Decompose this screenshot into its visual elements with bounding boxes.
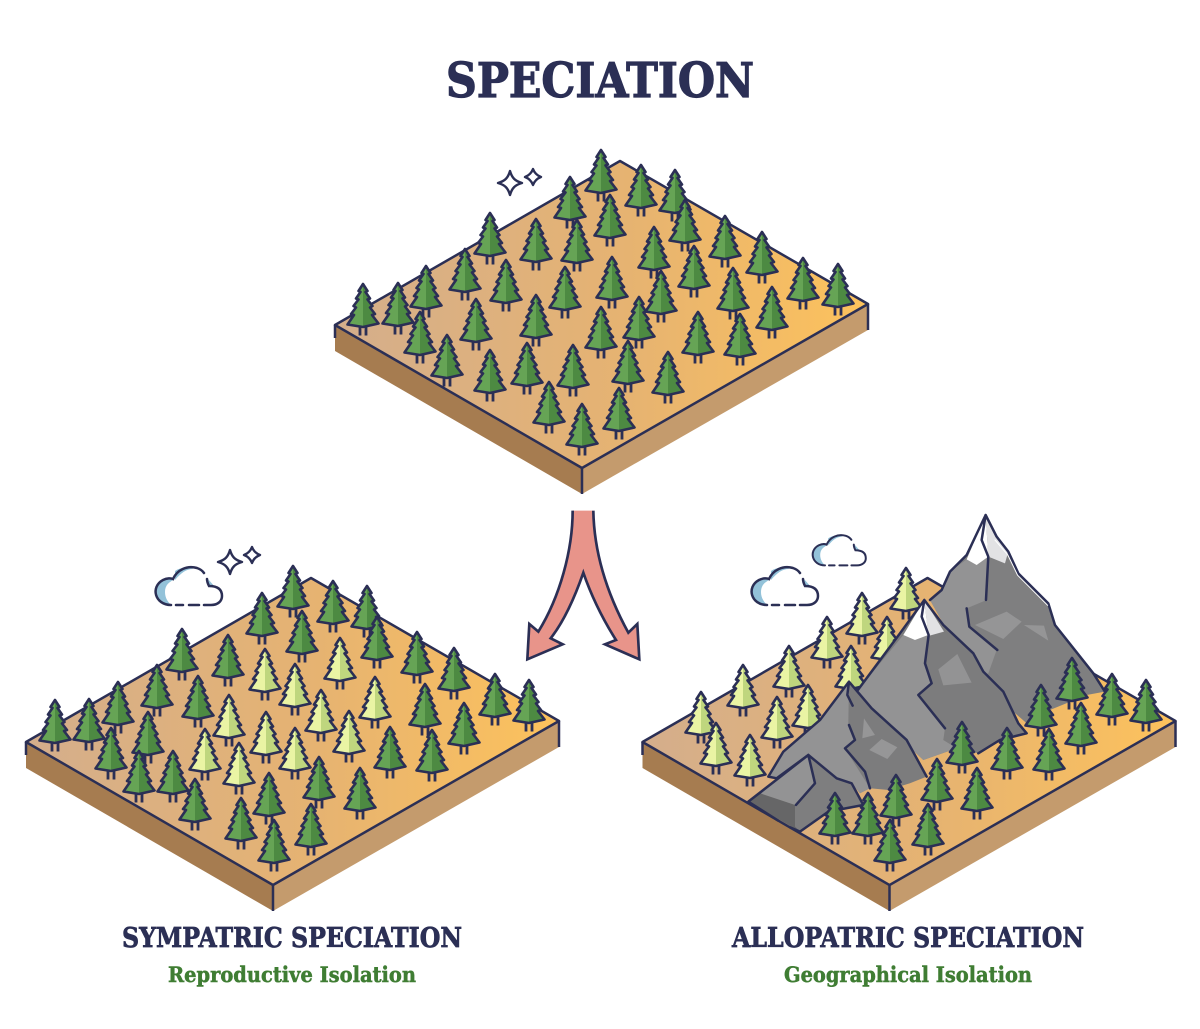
mountain: front ridge <box>768 682 927 793</box>
label: sympatric speciation: SYMPATRIC SPECIATION <box>122 923 462 954</box>
trees: light population <box>686 568 922 786</box>
icon: sparkles <box>218 547 260 574</box>
trees: green population <box>820 658 1162 872</box>
title: SPECIATION <box>446 53 754 109</box>
sublabel: reproductive isolation: Reproductive Isolation <box>168 962 416 987</box>
ground plate: top <box>335 161 868 494</box>
trees: original forest <box>348 150 854 456</box>
arrow: split into two paths <box>527 511 639 659</box>
trees: mixed forest <box>40 566 544 872</box>
panel: sympatric speciation <box>26 547 559 911</box>
sublabel: geographical isolation: Geographical Isolation <box>784 962 1032 987</box>
mountain: foot rock <box>748 755 863 832</box>
ground plate: sympatric <box>26 578 559 911</box>
panel: original population <box>335 150 868 494</box>
ground plate: allopatric <box>642 578 1176 911</box>
icon: cloud <box>156 567 222 605</box>
mountain: tall rear peak <box>930 515 1105 723</box>
panel: allopatric speciation <box>642 515 1176 911</box>
mountain: middle peak <box>849 600 1027 760</box>
icon: clouds <box>752 535 866 605</box>
icon: sparkles <box>498 169 541 195</box>
mountain range <box>748 515 1105 832</box>
label: allopatric speciation: ALLOPATRIC SPECIATION <box>731 923 1084 954</box>
